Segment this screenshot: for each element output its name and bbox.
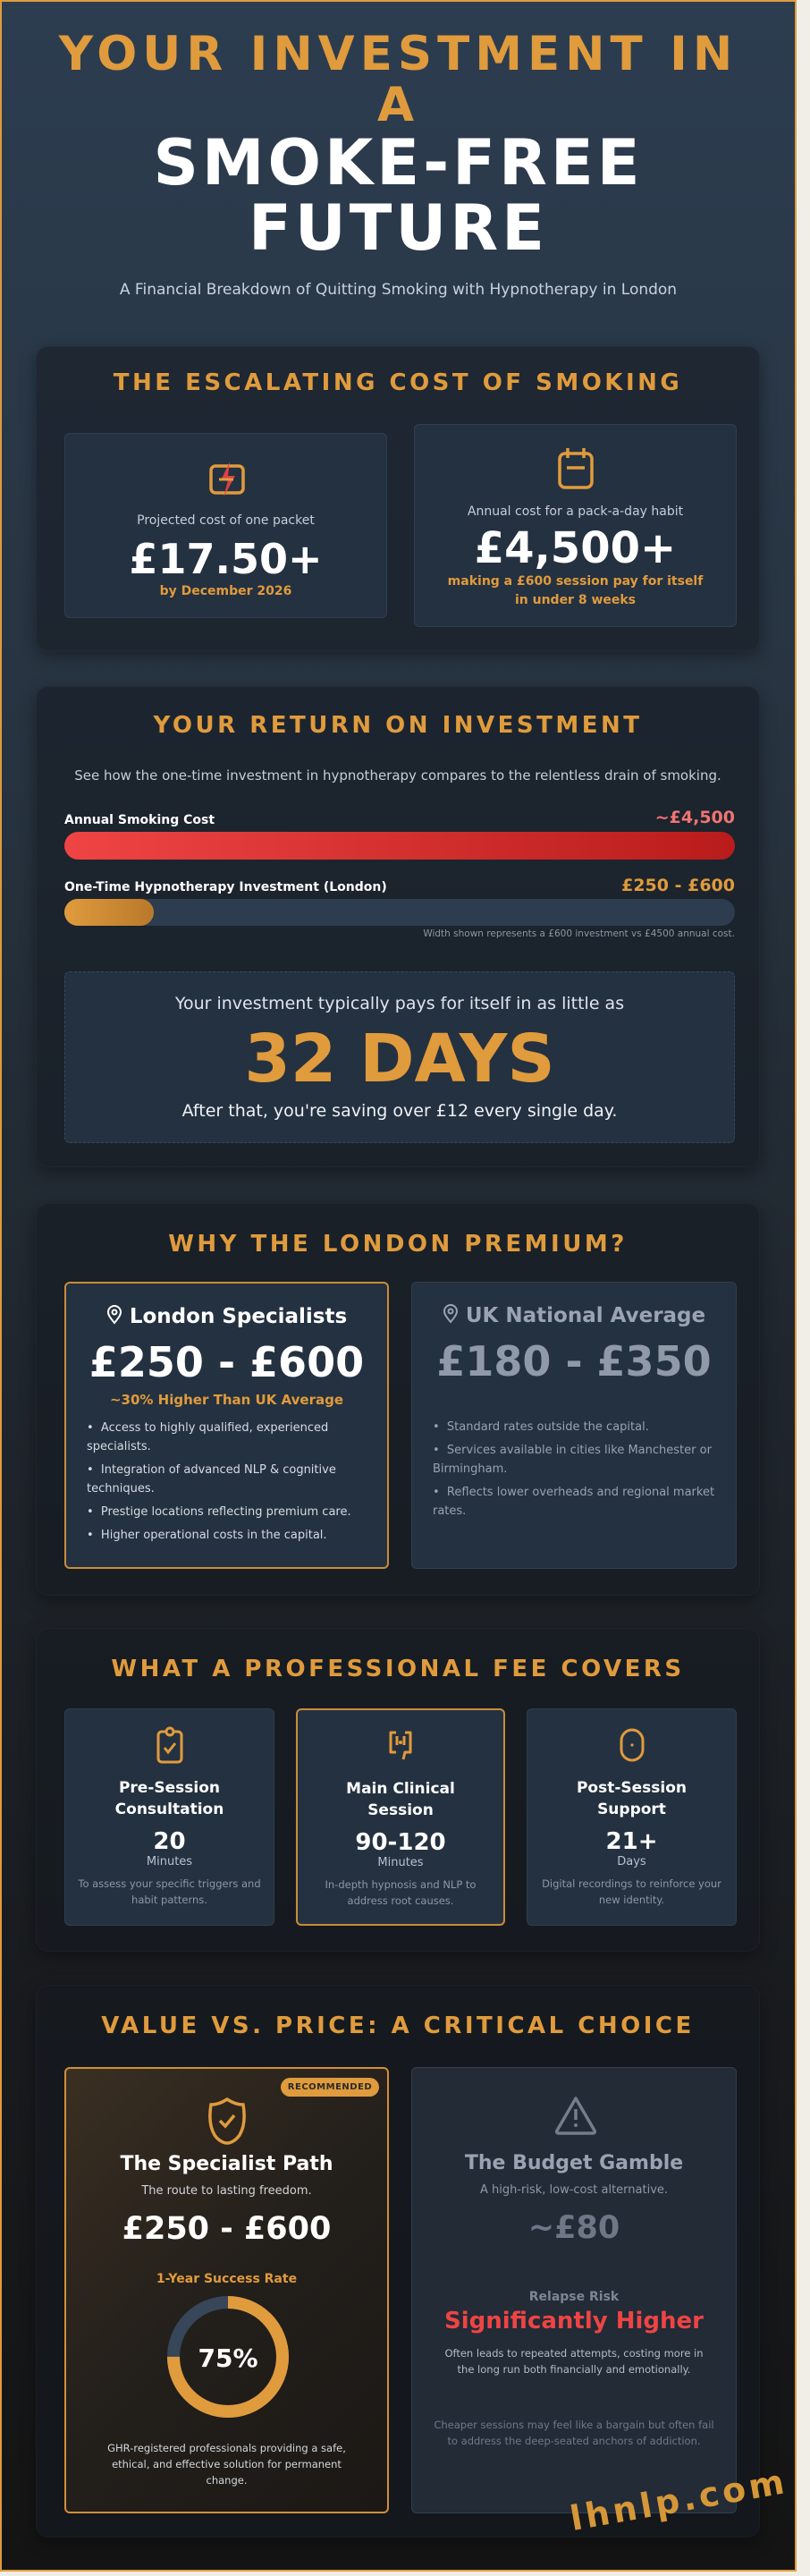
card: budget gamble: A high-risk, low-cost alternative. (480, 2183, 668, 2197)
card: annual cost (414, 424, 737, 627)
card: budget gamble: Significantly Higher (444, 2308, 704, 2334)
callout: payback: After that, you're saving over £12 every single day. (182, 1101, 617, 1121)
card: specialist path: £250 - £600 (122, 2211, 331, 2247)
bar chart: annual smoking: ~£4,500 (655, 808, 735, 827)
callout: payback: 32 DAYS (244, 1021, 555, 1097)
card: specialist path: The route to lasting freedom. (141, 2184, 312, 2198)
card: budget gamble: Cheaper sessions may feel like a bargain but often fail to address the deep-seated anchors of addiction. (434, 2419, 714, 2447)
card: packet cost: £17.50+ (129, 535, 323, 583)
card: packet cost (64, 433, 387, 618)
card: main session: In-depth hypnosis and NLP to address root causes. (325, 1878, 476, 1907)
heading: WHAT A PROFESSIONAL FEE COVERS (111, 1656, 685, 1682)
chart: donut 75%: 75% (198, 2343, 258, 2373)
card: london specialists: • Prestige locations reflecting premium care. (87, 1505, 351, 1519)
badge: recommended (281, 2078, 379, 2097)
header title: YOUR INVESTMENT IN (59, 27, 738, 81)
bar chart: annual smoking: Annual Smoking Cost (64, 813, 215, 827)
chart: donut 75% (167, 2296, 289, 2418)
card: london specialists (64, 1282, 389, 1569)
card: uk average: • Services available in cities like Manchester or Birmingham. (433, 1444, 712, 1476)
badge: recommended: RECOMMENDED (288, 2082, 372, 2092)
icon: clipboard (157, 1726, 182, 1764)
callout: payback (64, 971, 735, 1143)
bar chart: hypnotherapy (64, 876, 735, 939)
icon: recording (620, 1728, 644, 1762)
card: post-session: Days (617, 1855, 646, 1868)
card: budget gamble: Often leads to repeated attempts, costing more in the long run both financially and emotionally. (444, 2347, 704, 2376)
panel: escalating cost (36, 346, 760, 651)
card: main session (296, 1708, 505, 1926)
card: main session: Minutes (377, 1856, 424, 1869)
bar chart: annual smoking (64, 808, 735, 860)
card: annual cost: £4,500+ (475, 523, 676, 573)
card: specialist path: 1-Year Success Rate (156, 2272, 297, 2286)
icon: warning (555, 2097, 596, 2135)
intro text: See how the one-time investment in hypnotherapy compares to the relentless drain of smoking. (74, 767, 721, 784)
panel: london premium (36, 1203, 760, 1596)
card: annual cost: Annual cost for a pack-a-day habit (468, 504, 683, 519)
heading: WHY THE LONDON PREMIUM? (168, 1231, 628, 1258)
card: specialist path: The Specialist Path (120, 2153, 333, 2175)
heading: THE ESCALATING COST OF SMOKING (114, 369, 682, 396)
card: annual cost: making a £600 session pay for itself in under 8 weeks (448, 574, 703, 607)
card: main session: 90-120 (355, 1829, 446, 1856)
bar chart: hypnotherapy: £250 - £600 (621, 876, 735, 895)
header title: SMOKE-FREE (153, 126, 644, 199)
card: budget gamble: The Budget Gamble (465, 2152, 683, 2174)
card: uk average: • Standard rates outside the capital. (433, 1420, 649, 1434)
header title: FUTURE (249, 191, 548, 265)
watermark: lhnlp.com (567, 2462, 790, 2538)
card: pre-session: To assess your specific triggers and habit patterns. (78, 1877, 261, 1906)
bar chart: hypnotherapy: Width shown represents a £600 investment vs £4500 annual cost. (423, 928, 735, 939)
card: post-session: Post-Session (577, 1779, 687, 1797)
card: london specialists: • Access to highly qualified, experienced specialists. (87, 1421, 328, 1453)
card: post-session: Support (597, 1801, 666, 1818)
card: london specialists: • Higher operational costs in the capital. (87, 1529, 327, 1542)
card: budget gamble: ~£80 (528, 2210, 620, 2246)
card: london specialists: £250 - £600 (89, 1338, 364, 1386)
header title: A (377, 78, 419, 132)
card: post-session (527, 1708, 737, 1926)
heading: YOUR RETURN ON INVESTMENT (154, 712, 642, 739)
heading: VALUE VS. PRICE: A CRITICAL CHOICE (101, 2012, 695, 2039)
card: uk average: • Reflects lower overheads and regional market rates. (433, 1486, 714, 1518)
header title (58, 27, 738, 265)
bar chart: hypnotherapy: One-Time Hypnotherapy Investment (London) (64, 880, 387, 894)
panel: fee covers (36, 1628, 760, 1952)
icon: shield (208, 2097, 246, 2145)
card: london specialists: London Specialists (130, 1305, 347, 1328)
card: packet cost: Projected cost of one packet (137, 513, 315, 528)
card: main session: Session (367, 1801, 434, 1819)
card: budget gamble (411, 2067, 737, 2513)
card: uk average (411, 1282, 737, 1569)
card: budget gamble: Relapse Risk (529, 2290, 619, 2304)
icon: calendar (558, 448, 594, 489)
callout: payback: Your investment typically pays for itself in as little as (175, 994, 624, 1013)
card: pre-session: Minutes (147, 1855, 192, 1868)
card: post-session: 21+ (606, 1828, 657, 1855)
card: uk average: UK National Average (466, 1304, 705, 1327)
card: pre-session: Pre-Session (119, 1779, 220, 1797)
subtitle: A Financial Breakdown of Quitting Smoking with Hypnotherapy in London (120, 281, 677, 299)
card: uk average: £180 - £350 (436, 1337, 712, 1385)
icon: head (390, 1732, 411, 1760)
card: pre-session: Consultation (115, 1801, 224, 1818)
card: london specialists: • Integration of advanced NLP & cognitive techniques. (87, 1463, 336, 1496)
card: packet cost: by December 2026 (160, 584, 291, 598)
icon: packet (209, 462, 245, 497)
card: pre-session: 20 (153, 1828, 186, 1855)
card: pre-session (64, 1708, 274, 1926)
panel: value vs price (36, 1985, 760, 2538)
card: post-session: Digital recordings to reinforce your new identity. (542, 1877, 721, 1906)
card: specialist path (64, 2067, 389, 2513)
panel: return on investment (36, 686, 760, 1167)
card: london specialists: ~30% Higher Than UK Average (110, 1392, 343, 1408)
card: specialist path: GHR-registered professionals providing a safe, ethical, and effective solution for permanent change. (107, 2442, 346, 2487)
card: main session: Main Clinical (346, 1780, 455, 1798)
